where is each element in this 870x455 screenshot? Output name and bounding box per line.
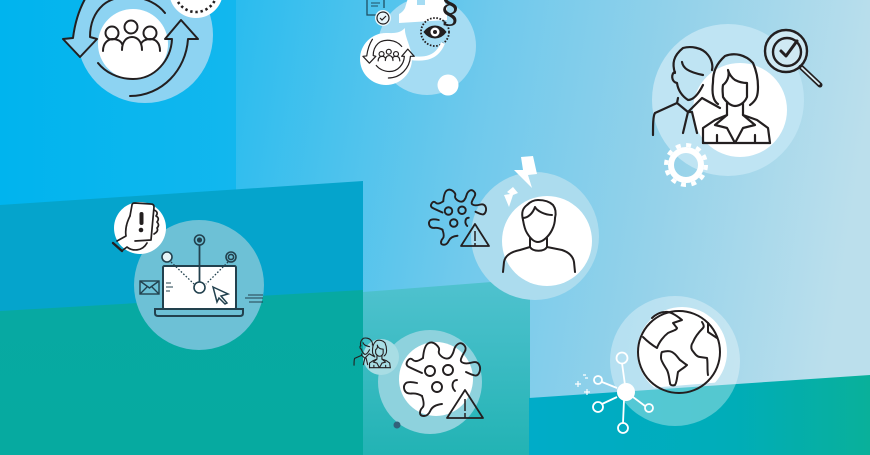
icon: person under stress <box>429 156 599 300</box>
icon: virus with people <box>354 330 483 434</box>
background: lighter upper panel <box>236 0 870 400</box>
network lines <box>171 245 228 284</box>
white speech disc <box>360 28 412 85</box>
halo circle <box>134 220 264 350</box>
white dotted badge <box>169 0 223 18</box>
eye icon <box>421 18 449 46</box>
document icon <box>367 0 391 26</box>
network hub <box>593 352 653 433</box>
cursor <box>213 287 228 304</box>
background: green lower band <box>0 290 363 455</box>
virus with warning <box>429 190 489 246</box>
speed lines <box>245 295 263 302</box>
globe <box>638 311 720 393</box>
person outline <box>503 200 575 272</box>
man and woman <box>653 47 770 143</box>
white disc <box>98 9 168 79</box>
nodes <box>162 235 236 293</box>
white disc <box>637 307 727 388</box>
lightning bolts <box>504 156 537 207</box>
halo circle <box>378 330 482 434</box>
laptop base <box>155 309 243 316</box>
background: bottom right teal panel <box>529 375 870 455</box>
magnifier check <box>765 30 820 85</box>
icon: business people <box>652 24 820 185</box>
gear <box>666 145 706 185</box>
envelope <box>140 281 173 294</box>
white dot <box>438 74 458 96</box>
warning triangle <box>447 390 483 418</box>
sparkles <box>575 375 590 395</box>
white connector <box>410 43 443 59</box>
small cycle arrows <box>363 39 414 78</box>
phone alert badge <box>113 202 166 254</box>
left arrow fill <box>63 0 110 57</box>
big virus <box>404 342 480 416</box>
halo circle <box>471 172 599 300</box>
team people and cycle arrows <box>63 0 198 96</box>
hub center <box>617 383 635 401</box>
background: dark teal band <box>0 181 363 312</box>
laptop screen <box>163 266 236 309</box>
icon: laptop network <box>113 202 264 350</box>
halo circle <box>378 0 476 95</box>
white disc <box>399 342 473 416</box>
white disc <box>693 63 787 157</box>
dark dot <box>394 422 400 428</box>
halo circle <box>652 24 804 176</box>
background: middle translucent panel <box>363 279 530 455</box>
halo circle <box>610 296 740 426</box>
small people badge <box>354 338 399 375</box>
halo circle <box>77 0 213 103</box>
white disc <box>502 196 592 286</box>
icon: globe network <box>575 296 740 433</box>
icon: team cycle <box>63 0 223 103</box>
white helmet <box>399 0 447 23</box>
icon: compliance cluster <box>360 0 476 96</box>
